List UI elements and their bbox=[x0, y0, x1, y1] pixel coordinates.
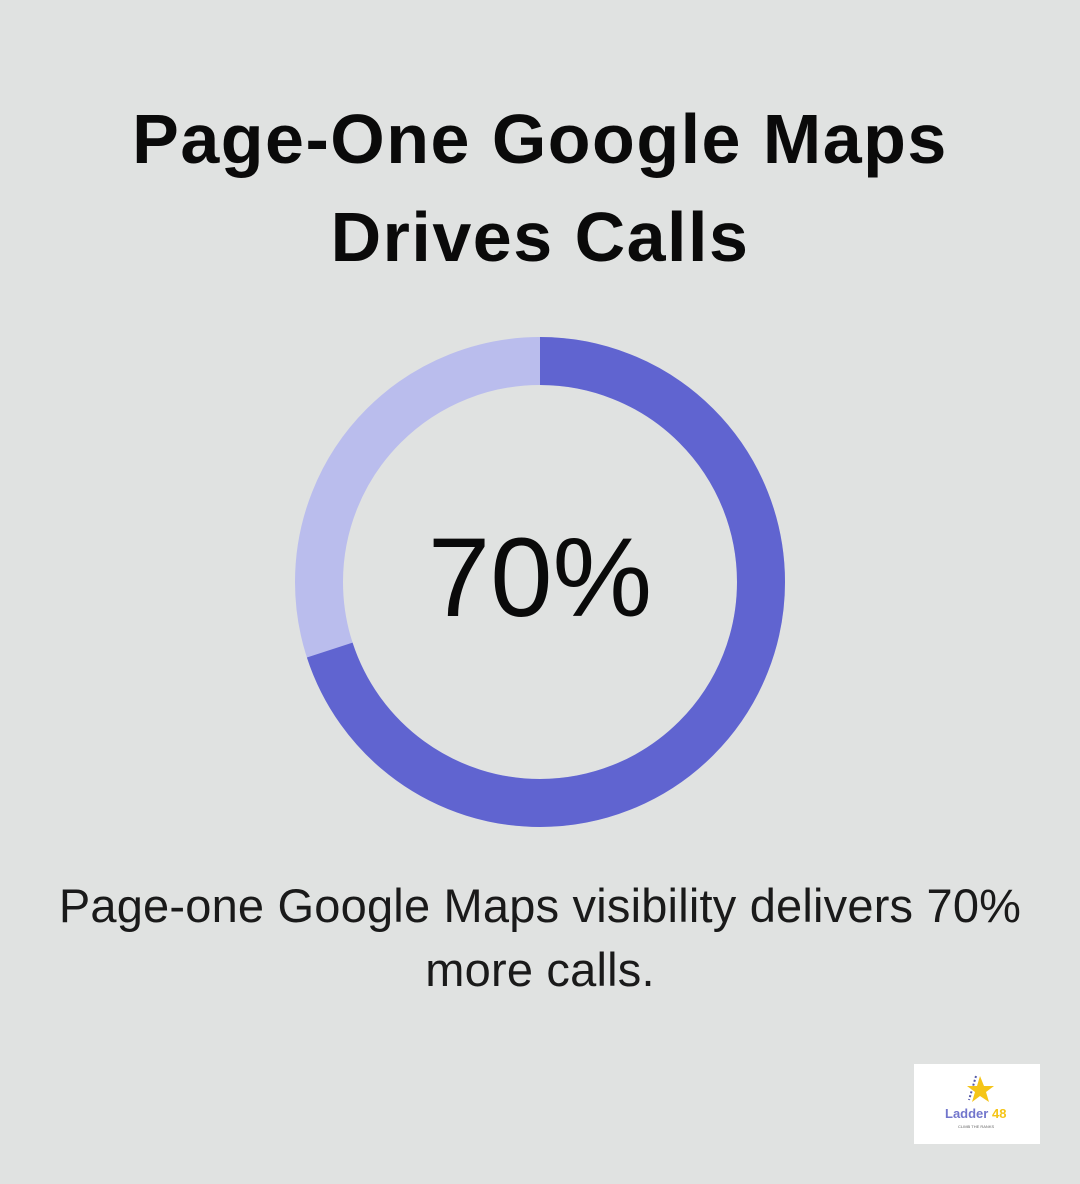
donut chart: 70% bbox=[428, 515, 652, 640]
logo bbox=[914, 1064, 1040, 1144]
logo: CLIMB THE RANKS bbox=[958, 1124, 994, 1129]
body text: more calls. bbox=[425, 943, 655, 996]
title bbox=[132, 100, 948, 276]
body text: Page-one Google Maps visibility delivers 70% bbox=[59, 879, 1021, 932]
body text bbox=[59, 879, 1021, 996]
title: Page-One Google Maps bbox=[132, 100, 948, 178]
logo: Ladder 48 bbox=[945, 1106, 1006, 1121]
title: Drives Calls bbox=[331, 198, 749, 276]
